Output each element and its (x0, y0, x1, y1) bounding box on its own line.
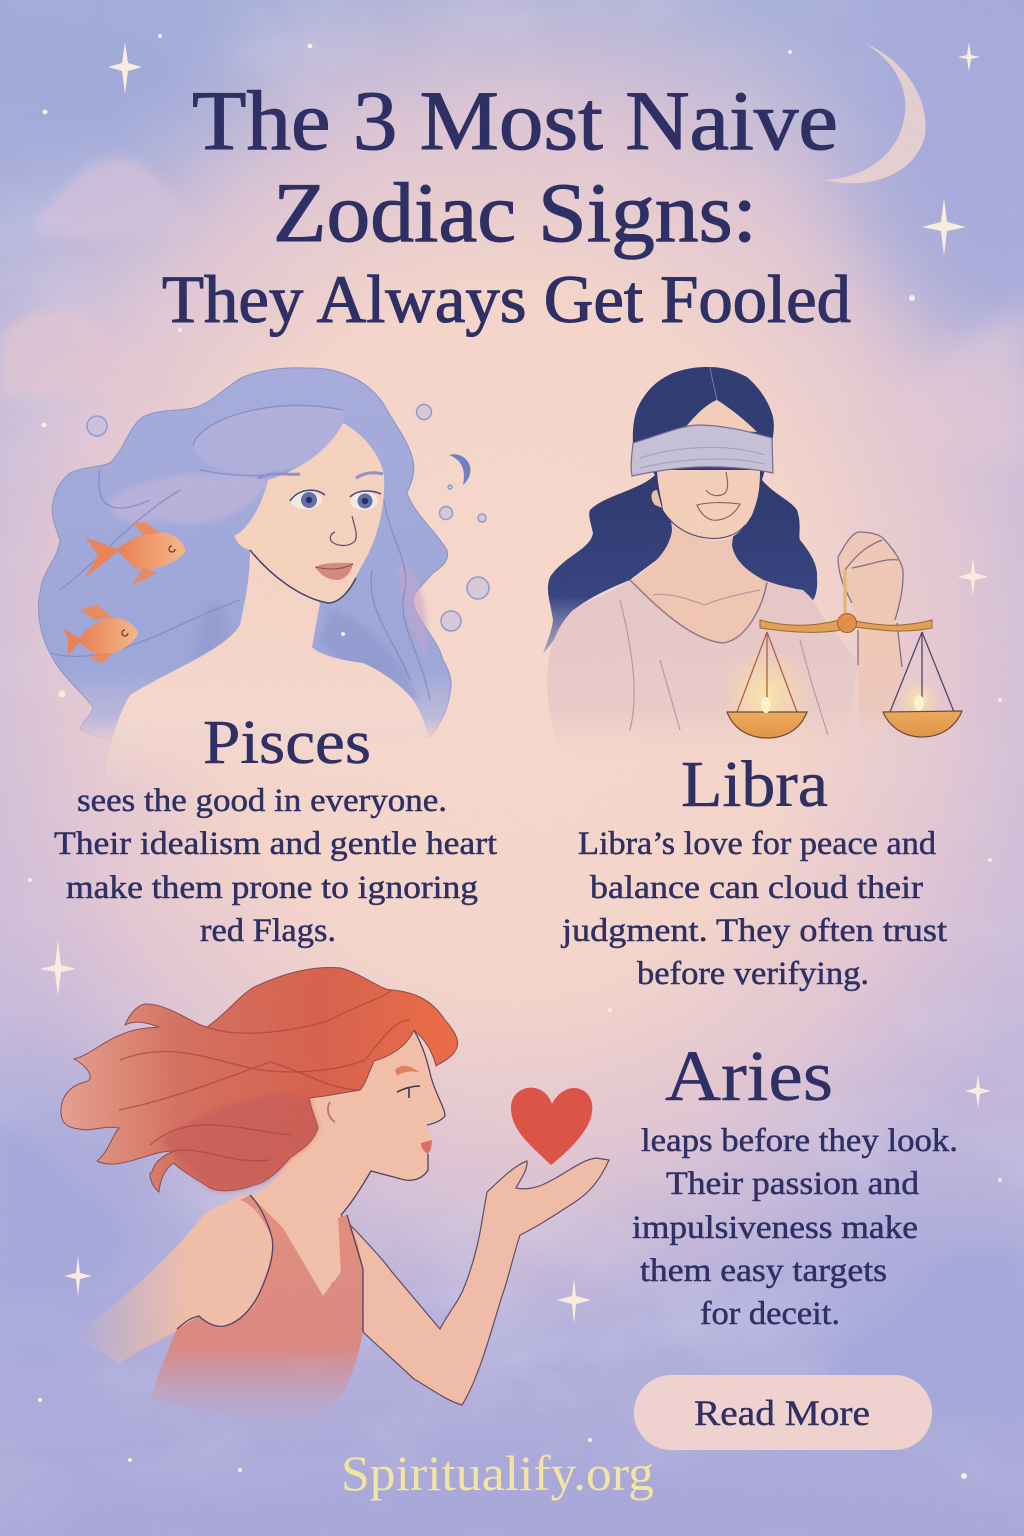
Aries description: leaps before they look. (641, 1123, 958, 1159)
Aries facial features (328, 1066, 432, 1154)
Libra hair (543, 367, 817, 653)
illustration: Libra blindfolded woman with scales (543, 367, 962, 760)
Libra text (561, 748, 947, 992)
Libra description: Libra’s love for peace and (578, 826, 937, 862)
Aries neck and face (250, 1030, 445, 1296)
Aries text (632, 1036, 958, 1332)
Pisces description: sees the good in everyone. (77, 783, 447, 819)
title (162, 74, 851, 337)
Aries heart (511, 1088, 592, 1165)
Libra scales (718, 570, 962, 743)
Pisces heading: Pisces (203, 709, 371, 777)
Pisces description: Their idealism and gentle heart (54, 826, 497, 862)
Aries description: impulsiveness make (632, 1210, 918, 1246)
Libra heading: Libra (681, 748, 828, 821)
Aries description: them easy targets (640, 1253, 887, 1289)
Libra robe (547, 580, 858, 760)
Aries tank top (150, 1195, 363, 1430)
Libra description: balance can cloud their (590, 870, 923, 906)
Pisces fish lower (63, 605, 138, 663)
Pisces facial features (290, 490, 381, 580)
Pisces hair (38, 368, 451, 745)
Pisces text (54, 709, 497, 949)
Pisces hair highlights (50, 405, 430, 725)
Libra face (657, 470, 760, 542)
Pisces face (234, 423, 384, 603)
Aries near arm (72, 1195, 273, 1363)
title: The 3 Most Naive (192, 74, 838, 168)
Aries flowing hair (61, 967, 458, 1192)
Libra neck (630, 510, 767, 643)
Libra description: before verifying. (637, 956, 869, 992)
Aries heading: Aries (665, 1036, 833, 1116)
Aries description: Their passion and (666, 1166, 920, 1202)
Libra blindfold (631, 425, 773, 476)
Libra smile and nose (697, 472, 740, 520)
Libra description: judgment. They often trust (561, 913, 947, 949)
illustration: Pisces woman with fish (38, 368, 489, 790)
illustration: Aries red-haired woman with heart (61, 967, 609, 1430)
Pisces description: make them prone to ignoring (66, 870, 478, 906)
title: They Always Get Fooled (162, 261, 851, 337)
website footer: Spiritualify.org (341, 1445, 654, 1501)
Pisces neck and shoulders (105, 550, 430, 790)
Aries hair shading (119, 990, 410, 1191)
title: Zodiac Signs: (273, 166, 757, 260)
Pisces moon and bubbles (87, 404, 489, 636)
Read More button: Read More (694, 1393, 870, 1433)
Aries description (632, 1123, 958, 1332)
Aries description: for deceit. (700, 1296, 840, 1332)
Aries far arm (330, 1158, 609, 1405)
Libra forehead (685, 400, 757, 432)
Pisces fish upper (85, 522, 185, 585)
Read More button (634, 1375, 932, 1450)
Pisces description: red Flags. (200, 913, 336, 949)
Libra description (561, 826, 947, 992)
crescent moon (824, 44, 926, 183)
Pisces description (54, 783, 497, 949)
Libra hand and arm (838, 532, 903, 750)
